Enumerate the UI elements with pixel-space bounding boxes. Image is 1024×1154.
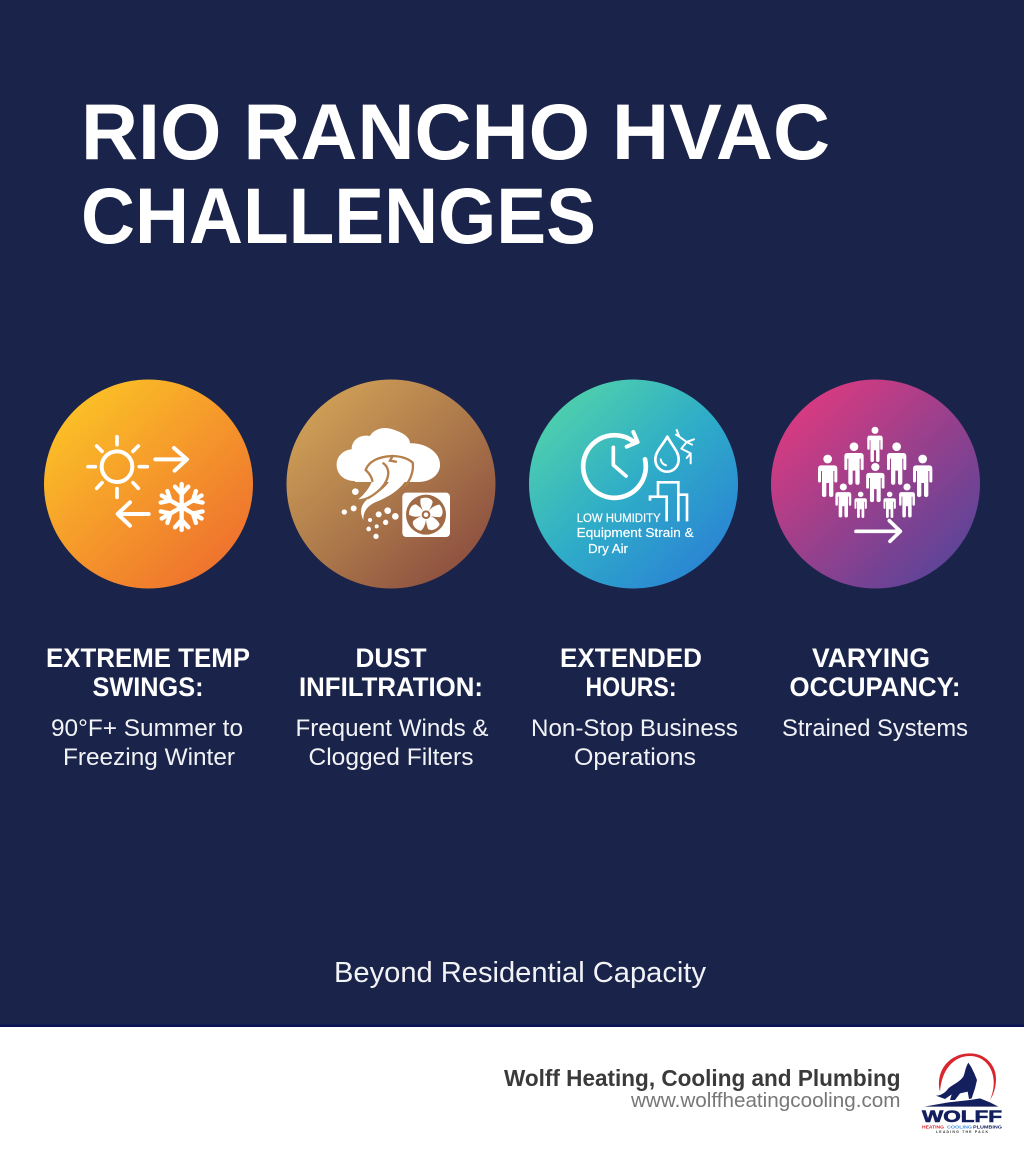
heading: dust infiltration: DUST: [356, 643, 427, 673]
heading: extreme temp swings: EXTREME TEMP: [46, 643, 250, 673]
panel: dust infiltration: [286, 380, 496, 771]
title: RIO RANCHO HVAC: [81, 87, 830, 176]
icon text: low humidity: Equipment Strain &: [577, 525, 694, 540]
panel: varying occupancy: [771, 380, 980, 742]
heading: dust infiltration: [299, 643, 483, 702]
logo: Wolff: LEADING THE PACK: [936, 1130, 988, 1134]
footer panel: [0, 1024, 1024, 1154]
text: dust description: Frequent Winds &: [296, 715, 488, 742]
panel: extended hours: [529, 380, 738, 771]
text: extended hours description: [531, 715, 738, 771]
icon text: low humidity: [577, 513, 694, 556]
heading: extreme temp swings: [46, 643, 250, 702]
icon text: low humidity: LOW HUMIDITY: [577, 513, 661, 525]
text: extreme temp description: Freezing Winter: [63, 744, 235, 771]
icon text: low humidity: Dry Air: [588, 541, 629, 556]
logo: Wolff: COOLING: [947, 1124, 973, 1130]
text: extended hours description: Non-Stop Business: [531, 715, 738, 742]
text: extreme temp description: 90°F+ Summer to: [51, 715, 243, 742]
heading: varying occupancy: [790, 643, 960, 702]
text: extended hours description: Operations: [574, 744, 696, 771]
logo: Wolff: PLUMBING: [973, 1124, 1003, 1130]
heading: dust infiltration: INFILTRATION:: [299, 672, 483, 702]
icon circle: temperature swings: [44, 380, 253, 588]
logo: Wolff: HEATING: [922, 1124, 945, 1130]
tagline: Beyond Residential Capacity: [334, 957, 706, 989]
text: dust description: [296, 715, 488, 771]
text: extreme temp description: [51, 715, 243, 771]
footer company name: Wolff Heating, Cooling and Plumbing: [504, 1065, 900, 1091]
heading: extended hours: EXTENDED: [560, 643, 702, 673]
icon circle: people and arrow: [771, 380, 980, 588]
panel: extreme temp swings: [44, 380, 253, 771]
heading: extended hours: [560, 643, 702, 702]
icon circle: clock, humidity and equipment strain: [529, 380, 738, 588]
title: CHALLENGES: [81, 171, 596, 260]
heading: varying occupancy: VARYING: [812, 643, 930, 673]
title: [81, 87, 830, 260]
footer website: www.wolffheatingcooling.com: [630, 1090, 900, 1112]
text: varying occupancy description: Strained Systems: [782, 715, 968, 742]
icon circle: dust and fan: [286, 380, 496, 588]
logo: Wolff: [922, 1053, 1003, 1134]
heading: extreme temp swings: SWINGS:: [92, 672, 204, 702]
text: dust description: Clogged Filters: [308, 744, 474, 771]
logo: Wolff: WOLFF: [922, 1108, 1002, 1126]
heading: extended hours: HOURS:: [586, 672, 676, 702]
heading: varying occupancy: OCCUPANCY:: [790, 672, 960, 702]
